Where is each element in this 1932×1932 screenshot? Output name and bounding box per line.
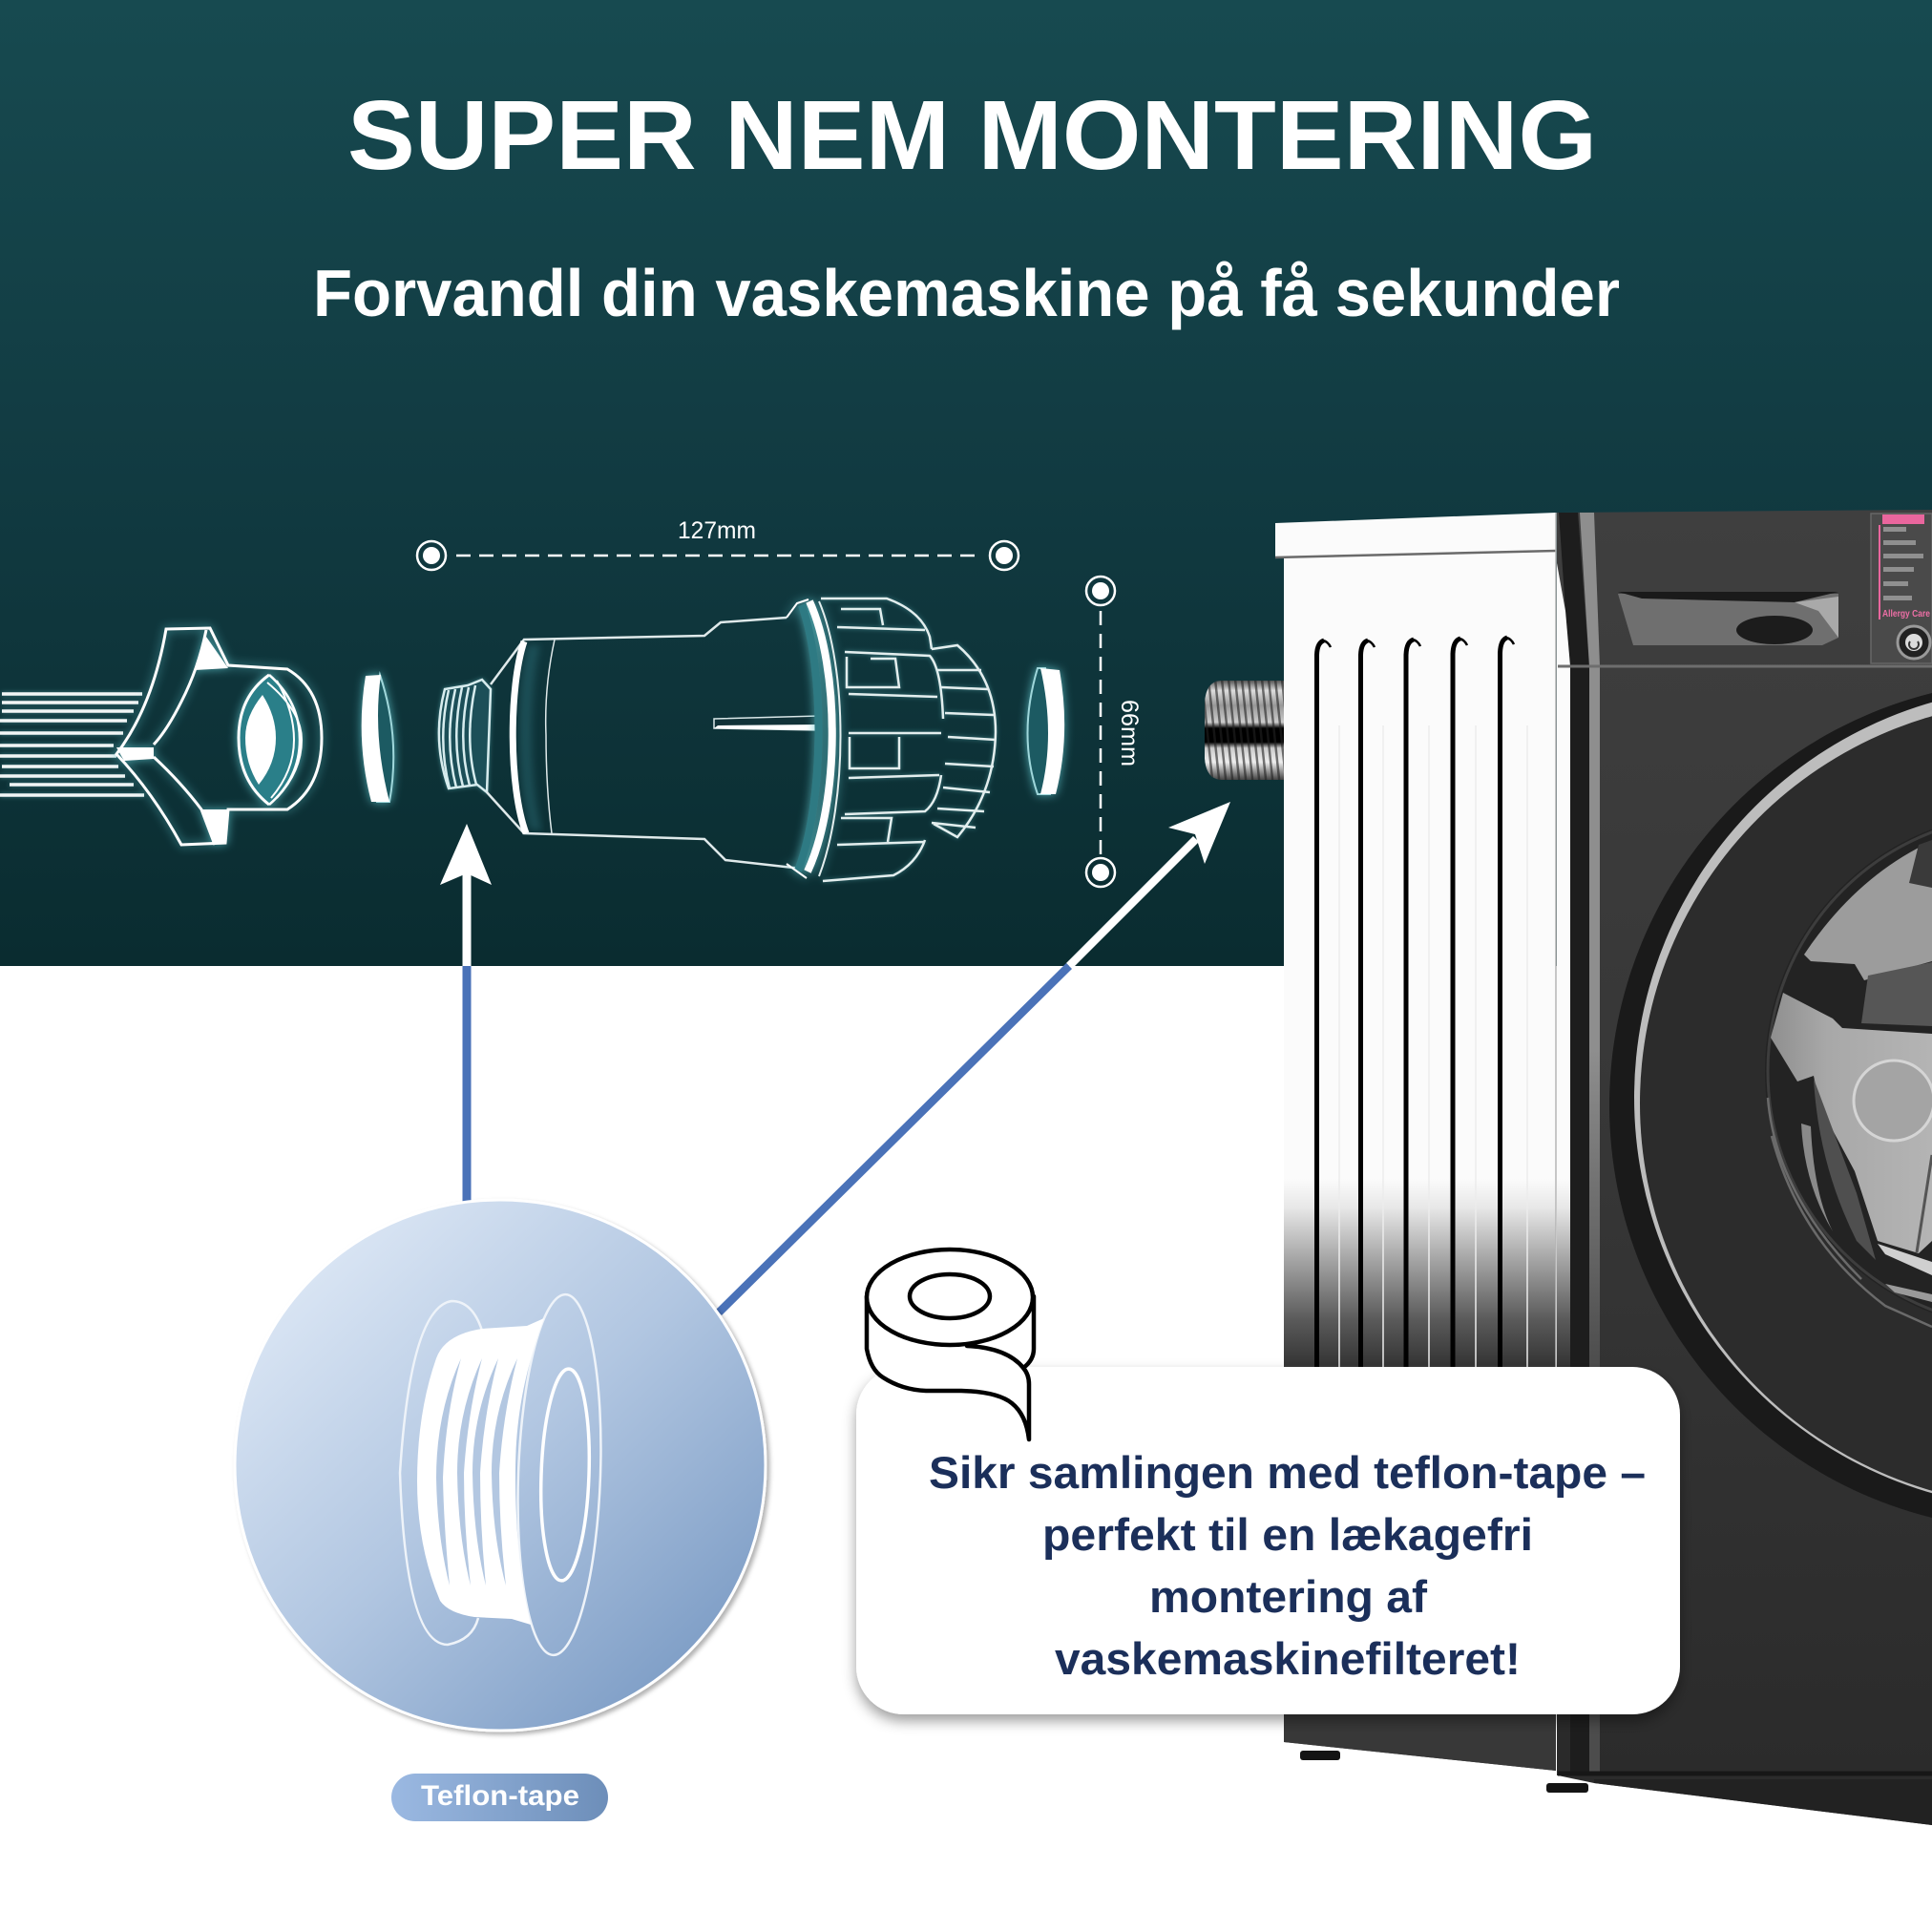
machine side panel	[1275, 513, 1556, 1771]
callout text: montering af	[1149, 1571, 1427, 1622]
filter body	[487, 598, 996, 881]
teflon tape roll illustration	[400, 1293, 607, 1656]
subtitle: Forvandl din vaskemaskine på få sekunder	[313, 256, 1620, 330]
label: Teflon-tape	[391, 1774, 608, 1821]
dimension: diameter	[1086, 577, 1143, 887]
machine feet	[1300, 1751, 1588, 1793]
filter flange ring	[787, 599, 840, 878]
door glass	[1765, 812, 1932, 1330]
threaded inlet bolt	[1205, 681, 1284, 780]
machine door	[1609, 681, 1932, 1530]
machine front panel	[1557, 510, 1932, 1825]
dimension: length: 127mm	[678, 517, 756, 544]
hose lines	[0, 694, 144, 795]
dimension: diameter: 66mm	[1116, 700, 1143, 766]
callout text	[929, 1447, 1646, 1684]
dimension: length	[417, 517, 1018, 570]
label: Teflon-tape: Teflon-tape	[421, 1780, 579, 1812]
control panel	[1871, 514, 1932, 663]
washing machine	[1275, 510, 1932, 1825]
dark teal header panel	[0, 0, 1932, 966]
filter end cap	[932, 645, 996, 837]
callout card	[856, 1367, 1680, 1714]
title: SUPER NEM MONTERING	[347, 80, 1597, 190]
right gasket washer	[1027, 668, 1064, 794]
hose coupling knob	[116, 628, 322, 845]
callout text: Sikr samlingen med teflon-tape –	[929, 1447, 1646, 1498]
filter threaded nozzle	[439, 680, 491, 792]
filter centre pin	[714, 716, 819, 730]
front edge strips	[1557, 513, 1932, 1825]
arrow: to machine inlet	[716, 802, 1230, 1315]
filter outer shell	[821, 598, 943, 881]
teflon tape circle	[235, 1200, 766, 1731]
detergent drawer handle	[1618, 592, 1838, 645]
left gasket washer	[362, 675, 393, 802]
icon: tape roll	[867, 1250, 1034, 1439]
callout text: vaskemaskinefilteret!	[1055, 1633, 1521, 1684]
arrow: to filter nozzle	[440, 824, 492, 1203]
callout text: perfekt til en lækagefri	[1042, 1509, 1533, 1560]
